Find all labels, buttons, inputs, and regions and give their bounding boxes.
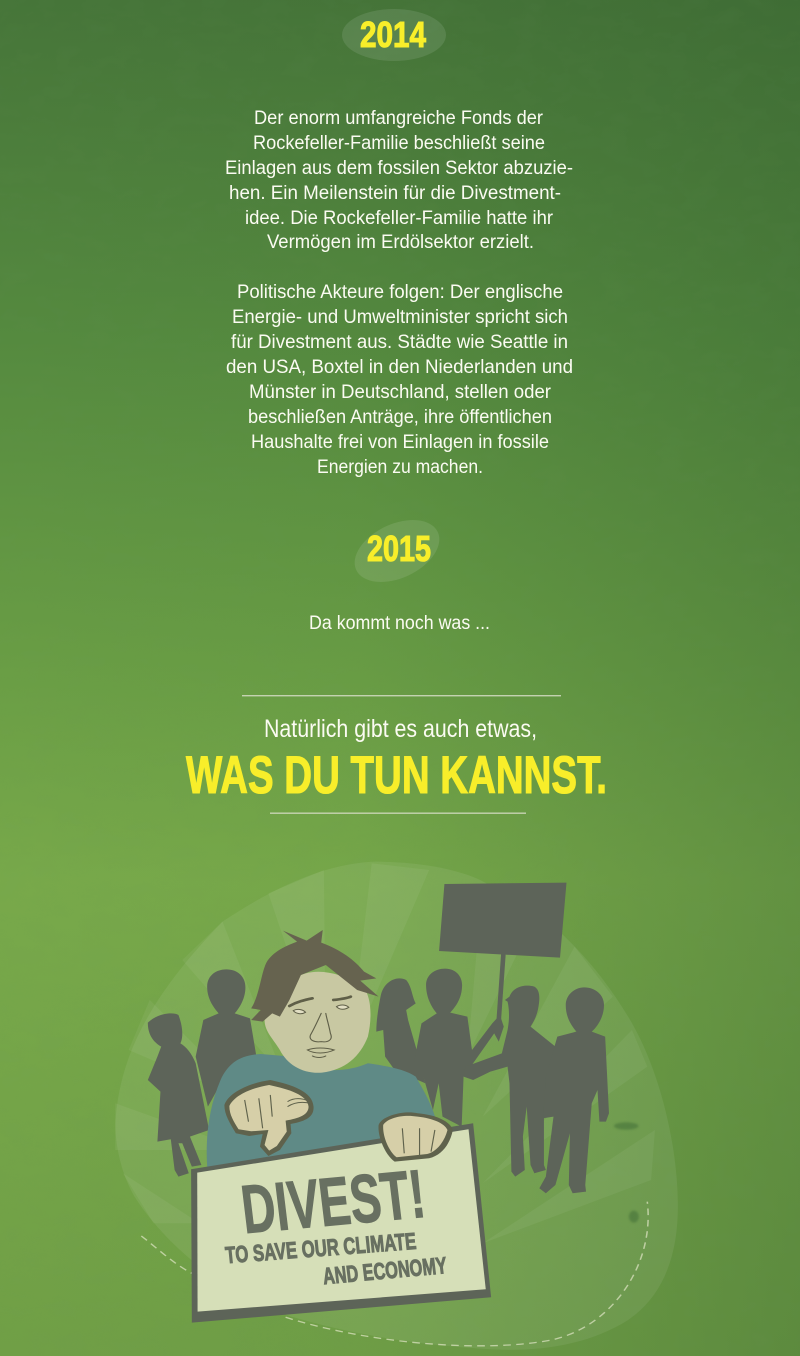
sign with text: [191, 1123, 491, 1323]
placard and pole: [439, 883, 567, 1020]
text block: political actors: Politische Akteure folgen: Der englische: [237, 282, 563, 303]
heading: call to action: [186, 715, 607, 805]
year badge: 2014: [342, 9, 446, 61]
sign with text: TO SAVE OUR CLIMATE: [224, 1228, 417, 1269]
main figure: [191, 930, 491, 1323]
section: 2014: [225, 9, 573, 478]
year badge: 2015: 2015: [367, 528, 431, 569]
heading: call to action: WAS DU TUN KANNST.: [186, 746, 607, 805]
dark blotches: [614, 1122, 639, 1223]
text block: Rockefeller fund: idee. Die Rockefeller-Familie hatte ihr: [245, 208, 554, 229]
man with raised arm: [414, 969, 504, 1127]
section: 2015: [309, 508, 490, 634]
text block: political actors: für Divestment aus. Städte wie Seattle in: [231, 332, 568, 353]
sign with text: AND ECONOMY: [321, 1253, 448, 1290]
sign with text: DIVEST!: [237, 1155, 429, 1248]
text block: Rockefeller fund: Rockefeller-Familie beschließt seine: [253, 133, 545, 154]
tall person silhouette: [196, 969, 256, 1107]
text block: Rockefeller fund: [225, 108, 573, 253]
head and face: [265, 972, 371, 1073]
heading: call to action: Natürlich gibt es auch etwas,: [264, 715, 537, 743]
text block: Rockefeller fund: Der enorm umfangreiche Fonds der: [254, 108, 544, 129]
man on right: [539, 987, 609, 1193]
illustration: protest group with DIVEST sign: [115, 862, 678, 1350]
text block: political actors: den USA, Boxtel in den Niederlanden und: [226, 357, 573, 378]
text block: political actors: Münster in Deutschland, stellen oder: [249, 382, 552, 403]
brows, eyes, nose, mouth: [289, 997, 351, 1057]
text block: political actors: Haushalte frei von Einlagen in fossile: [251, 432, 549, 453]
text block: political actors: Energien zu machen.: [317, 457, 483, 478]
text block: Rockefeller fund: Vermögen im Erdölsektor erzielt.: [267, 232, 534, 253]
text block: political actors: beschließen Anträge, ihre öffentlichen: [248, 407, 552, 428]
hair: [251, 930, 379, 1022]
dashed arc: [141, 1202, 648, 1346]
year badge: 2015: [345, 508, 449, 594]
pale blob with rays: [115, 862, 678, 1350]
text: Da kommt noch was: Da kommt noch was ...: [309, 613, 490, 634]
pointing hand: [224, 1080, 314, 1156]
text block: Rockefeller fund: hen. Ein Meilenstein für die Divestment-: [229, 183, 561, 204]
woman silhouette: [376, 978, 425, 1083]
gripping hand: [378, 1112, 453, 1162]
year badge: 2014: 2014: [360, 14, 426, 55]
girl silhouette: [148, 1013, 209, 1177]
silhouettes of protesters: [148, 883, 609, 1193]
text block: political actors: [226, 282, 573, 478]
shirt: [207, 1054, 444, 1167]
text block: Rockefeller fund: Einlagen aus dem fossilen Sektor abzuzie-: [225, 158, 573, 179]
text block: political actors: Energie- und Umweltminister spricht sich: [232, 307, 568, 328]
man with cap: [464, 986, 555, 1177]
